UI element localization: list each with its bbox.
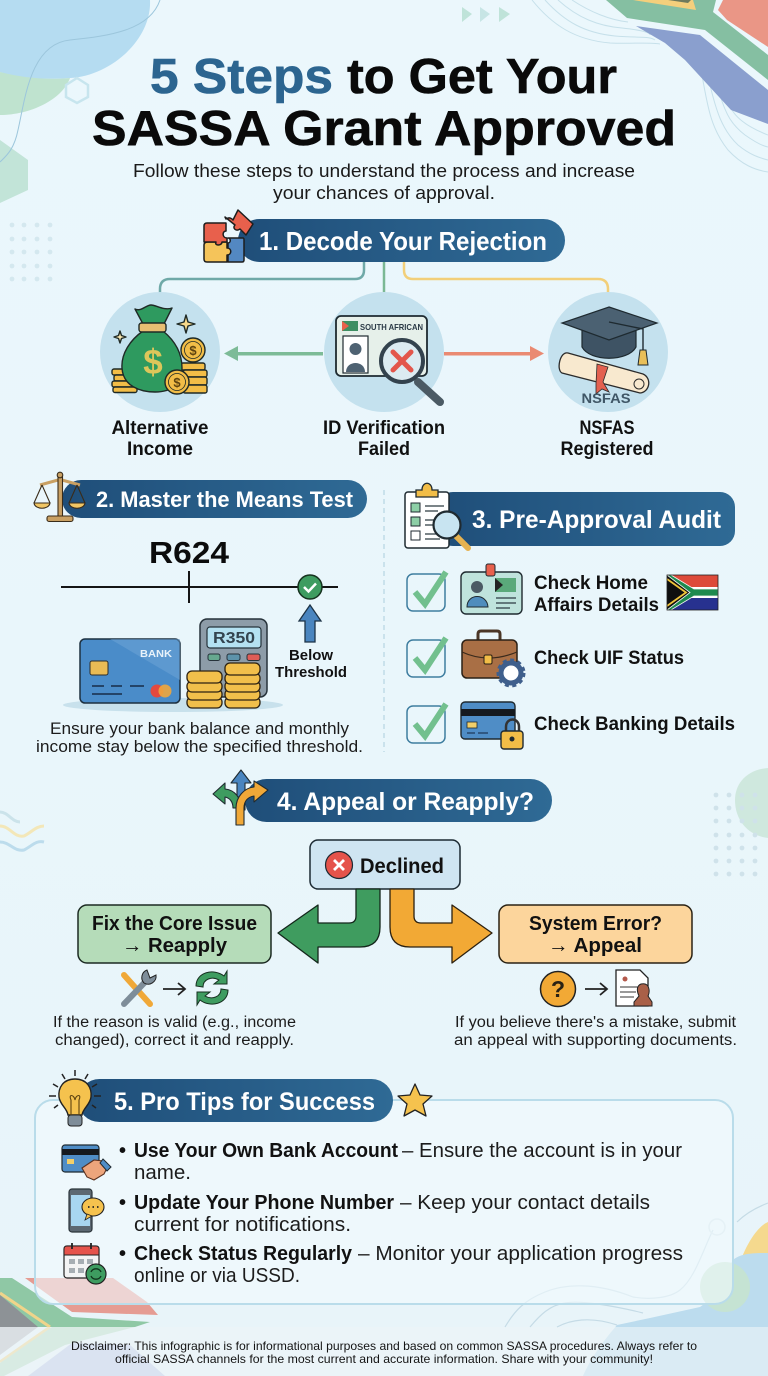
disclaimer: [71, 1339, 697, 1366]
label: alternative income: [112, 418, 208, 460]
title: [92, 50, 676, 156]
icon: scales: [34, 472, 85, 522]
box: reapply: Fix the Core Issue: [92, 913, 257, 935]
tip 2: – Keep your contact details: [400, 1192, 650, 1214]
decorative corner shapes top left: [0, 0, 160, 281]
arrow: declined to appeal: [390, 889, 492, 963]
description text: income stay below the specified threshold.: [36, 738, 363, 756]
circle: nsfas registered: [548, 292, 668, 412]
subtitle: Follow these steps to understand the process and increase: [133, 161, 635, 181]
icon: light bulb: [49, 1070, 101, 1126]
tip 1: – Ensure the account is in your: [402, 1140, 682, 1162]
icon: south african flag: [667, 575, 718, 610]
icon: clipboard and magnifier: [405, 483, 468, 548]
heading pill 3: [438, 492, 735, 546]
box: appeal: [499, 905, 692, 963]
row: home affairs: [407, 564, 659, 616]
circle: id verification failed: [324, 292, 444, 412]
label: id verification failed: Failed: [358, 439, 410, 460]
label: below threshold: Threshold: [275, 664, 347, 681]
section 5: pro tips panel: [35, 1070, 733, 1304]
row: banking details: [407, 702, 735, 749]
heading pill 3: 3. Pre-Approval Audit: [472, 506, 722, 534]
left explanation: [53, 1014, 296, 1049]
heading pill 2: [62, 480, 367, 518]
box: declined: Declined: [360, 855, 444, 878]
section 1: decode your rejection: [100, 210, 668, 460]
tip 3: – Monitor your application progress: [358, 1243, 683, 1265]
right explanation: If you believe there's a mistake, submit: [455, 1014, 737, 1031]
circle: nsfas registered: NSFAS: [582, 391, 630, 406]
panel outline: [35, 1100, 733, 1304]
circle: alternative income: $: [143, 343, 163, 382]
label: below threshold: [275, 647, 347, 681]
heading pill 1: 1. Decode Your Rejection: [259, 226, 547, 256]
row: uif status: [407, 631, 684, 686]
subtitle: [133, 161, 635, 203]
label: nsfas registered: NSFAS: [580, 418, 634, 439]
tip 3: •: [119, 1243, 126, 1265]
box: appeal: → Appeal: [548, 935, 642, 957]
box: reapply: → Reapply: [122, 935, 228, 957]
icons: fix and reapply: [124, 970, 228, 1005]
title: to Get Your: [347, 50, 617, 104]
label: alternative income: Alternative: [112, 418, 208, 439]
right explanation: an appeal with supporting documents.: [454, 1032, 737, 1049]
decorative flag shapes top right: [462, 0, 768, 172]
circle: alternative income: $: [189, 343, 197, 358]
threshold line: [61, 571, 338, 603]
title: SASSA Grant Approved: [92, 102, 676, 156]
icons: question to document: ?: [551, 976, 565, 1002]
heading pill 5: 5. Pro Tips for Success: [114, 1088, 375, 1116]
heading pill 2: 2. Master the Means Test: [96, 487, 354, 512]
heading pill 5: [78, 1079, 393, 1122]
row: home affairs: Affairs Details: [534, 595, 659, 616]
box: reapply: [78, 905, 271, 963]
arrow: to alternative income: [224, 346, 323, 361]
disclaimer: official SASSA channels for the most current and accurate information. Share with your community!: [115, 1352, 653, 1366]
left explanation: If the reason is valid (e.g., income: [53, 1014, 296, 1031]
arrow: declined to reapply: [278, 889, 380, 963]
tip 3: [64, 1243, 683, 1287]
tip 2: [69, 1189, 650, 1236]
subtitle: your chances of approval.: [273, 183, 495, 203]
icon: crossroad arrows: [213, 770, 268, 825]
section 3: pre-approval audit: [405, 483, 735, 749]
tip 1: name.: [134, 1162, 191, 1184]
circle: alternative income: $: [173, 375, 181, 390]
tip 3: Check Status Regularly: [134, 1243, 353, 1265]
section 4: appeal or reapply: [53, 770, 737, 1049]
decorative shapes bottom: [0, 1203, 768, 1376]
tip 1: •: [119, 1140, 126, 1162]
icon: puzzle: [204, 210, 253, 262]
right explanation: [454, 1014, 737, 1049]
arrow: to nsfas registered: [444, 346, 544, 361]
tip 2: Update Your Phone Number: [134, 1192, 394, 1214]
illustration: bank card calculator coins: BANK: [140, 649, 173, 660]
description text: [36, 720, 363, 756]
icons: question to document: [540, 970, 652, 1006]
circle: id verification failed: SOUTH AFRICAN: [360, 322, 423, 332]
arrow: below threshold: [299, 605, 321, 642]
row: home affairs: Check Home: [534, 573, 648, 594]
label: id verification failed: [323, 418, 445, 460]
tip 1: [62, 1140, 682, 1184]
section 2: master the means test: [34, 472, 367, 756]
box: appeal: System Error?: [529, 913, 662, 935]
tip 1: Use Your Own Bank Account: [134, 1140, 398, 1162]
tip 2: current for notifications.: [134, 1214, 351, 1236]
label: id verification failed: ID Verification: [323, 418, 445, 439]
description text: Ensure your bank balance and monthly: [50, 720, 350, 738]
title: 5 Steps: [150, 50, 333, 104]
circle: alternative income: [100, 292, 220, 412]
tip 2: •: [119, 1192, 126, 1214]
box: declined: [310, 840, 460, 889]
left explanation: changed), correct it and reapply.: [55, 1032, 294, 1049]
row: banking details: Check Banking Details: [534, 714, 735, 735]
connector lines: [160, 262, 608, 293]
disclaimer: Disclaimer: This infographic is for informational purposes and based on common SASSA procedures. Always refer to: [71, 1339, 697, 1353]
tip 3: online or via USSD.: [134, 1265, 300, 1287]
illustration: bank card calculator coins: R350: [213, 630, 255, 647]
label: below threshold: Below: [289, 647, 333, 664]
heading pill 4: [245, 779, 552, 822]
row: uif status: Check UIF Status: [534, 648, 684, 669]
label: nsfas registered: Registered: [560, 439, 654, 460]
icon: star: [398, 1084, 432, 1116]
heading pill 1: [238, 219, 565, 262]
heading pill 4: 4. Appeal or Reapply?: [277, 788, 534, 816]
label: alternative income: Income: [127, 439, 193, 460]
illustration: bank card calculator coins: [63, 619, 283, 712]
label: nsfas registered: [560, 418, 654, 460]
decorative shapes right side and left side: [0, 768, 768, 876]
value: R624: R624: [149, 535, 230, 570]
